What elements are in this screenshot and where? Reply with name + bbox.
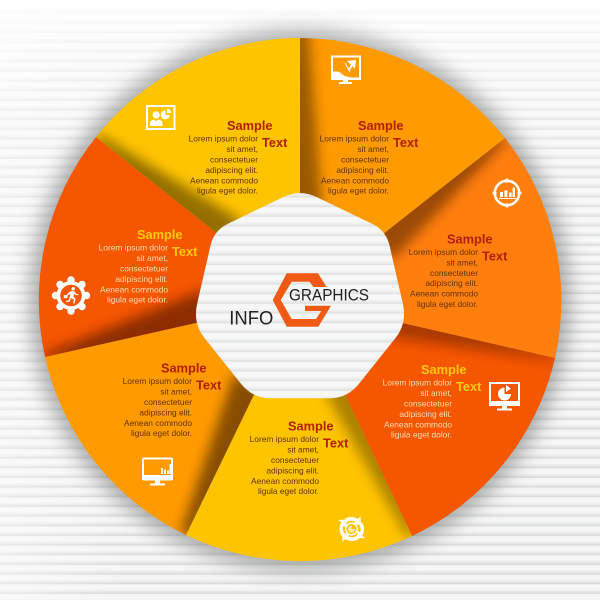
text block: left: Aenean commodo [100,284,168,294]
text block: right: Lorem ipsum dolor [409,247,478,257]
segment: top right [300,38,505,300]
icon: gear with running person [52,276,90,315]
text block: top left: Lorem ipsum dolor [189,134,258,144]
logo mark: hexagonal G [273,273,331,327]
text block: right: Text [482,248,508,263]
center heptagon [196,193,404,398]
text block: top right [320,118,419,196]
text block: left: ligula eget dolor. [107,295,168,305]
text block: right [409,231,508,309]
panel: wheel segments [39,38,561,561]
text block: top left: adipiscing elit. [205,165,258,175]
text block: bottom: Aenean commodo [251,476,319,486]
text block: bottom: consectetuer [271,455,319,465]
text block: top left: sit amet, [226,144,258,154]
segment: top left [96,38,300,300]
text block: left: consectetuer [120,264,168,274]
icon: monitor with bar chart [142,458,173,486]
text block: lower right: Sample [421,362,467,377]
segment fold shadows [44,20,555,538]
text block: lower right: consectetuer [404,398,452,408]
text block: top right: Aenean commodo [321,175,389,185]
text block: lower right [383,362,482,440]
segment: lower left [45,300,300,535]
text block: bottom [250,418,349,496]
text block: left: adipiscing elit. [115,274,168,284]
text block: lower left: Aenean commodo [124,418,192,428]
text block: right: sit amet, [446,257,478,267]
segment: lower right [300,300,555,536]
text block: left [99,227,198,305]
text block: lower right: Text [456,379,482,394]
icon: circular arrows [338,516,366,542]
text block: lower right: sit amet, [420,388,452,398]
text block: top left [189,118,288,196]
text block: left: Text [172,244,198,259]
segment: bottom [186,300,412,561]
text block: bottom: Lorem ipsum dolor [250,434,319,444]
icon: presentation with person and pie [147,106,174,129]
text block: left: Lorem ipsum dolor [99,243,168,253]
text block: top left: ligula eget dolor. [197,186,258,196]
text block: bottom: ligula eget dolor. [258,486,319,496]
icon: monitor with pie chart [489,383,520,410]
text block: top right: ligula eget dolor. [328,186,389,196]
text block: top right: adipiscing elit. [336,165,389,175]
text block: top left: consectetuer [210,154,258,164]
text block: right: Sample [447,231,493,246]
text block: bottom: sit amet, [287,445,319,455]
text block: lower left: Lorem ipsum dolor [123,376,192,386]
text block: top right: sit amet, [357,144,389,154]
segment: right [300,138,561,358]
logo word: INFO: INFO [229,307,273,329]
text block: lower right: Lorem ipsum dolor [383,378,452,388]
text block: top left: Aenean commodo [190,175,258,185]
text block: top left: Text [262,135,288,150]
text block: lower right: ligula eget dolor. [391,430,452,440]
text block: left: sit amet, [136,253,168,263]
text block: lower right: Aenean commodo [384,419,452,429]
text block: top left: Sample [227,118,273,133]
text block: bottom: Sample [288,418,334,434]
text block: top right: Lorem ipsum dolor [320,134,389,144]
logo: info graphics [229,273,369,329]
text block: bottom: Text [323,436,349,450]
icon: monitor with arrow [331,56,361,84]
text block: lower left: consectetuer [144,397,192,407]
text block: lower left: sit amet, [160,387,192,397]
icon: chart in circle [492,178,522,208]
text block: right: ligula eget dolor. [417,299,478,309]
text block: lower left: Sample [161,360,207,376]
text block: right: consectetuer [430,268,478,278]
text block: lower left: adipiscing elit. [139,407,192,417]
text block: right: adipiscing elit. [425,278,478,288]
text block: lower left: ligula eget dolor. [131,428,192,438]
text block: lower right: adipiscing elit. [399,409,452,419]
text block: lower left: Text [196,378,222,392]
text block: top right: Text [393,135,419,150]
logo word: GRAPHICS: GRAPHICS [289,286,369,305]
text block: lower left [123,360,222,438]
text block: top right: Sample [358,118,404,133]
text block: top right: consectetuer [341,154,389,164]
text block: right: Aenean commodo [410,289,478,299]
text block: left: Sample [137,227,183,242]
text block: bottom: adipiscing elit. [266,465,319,475]
segment: left [39,137,300,357]
